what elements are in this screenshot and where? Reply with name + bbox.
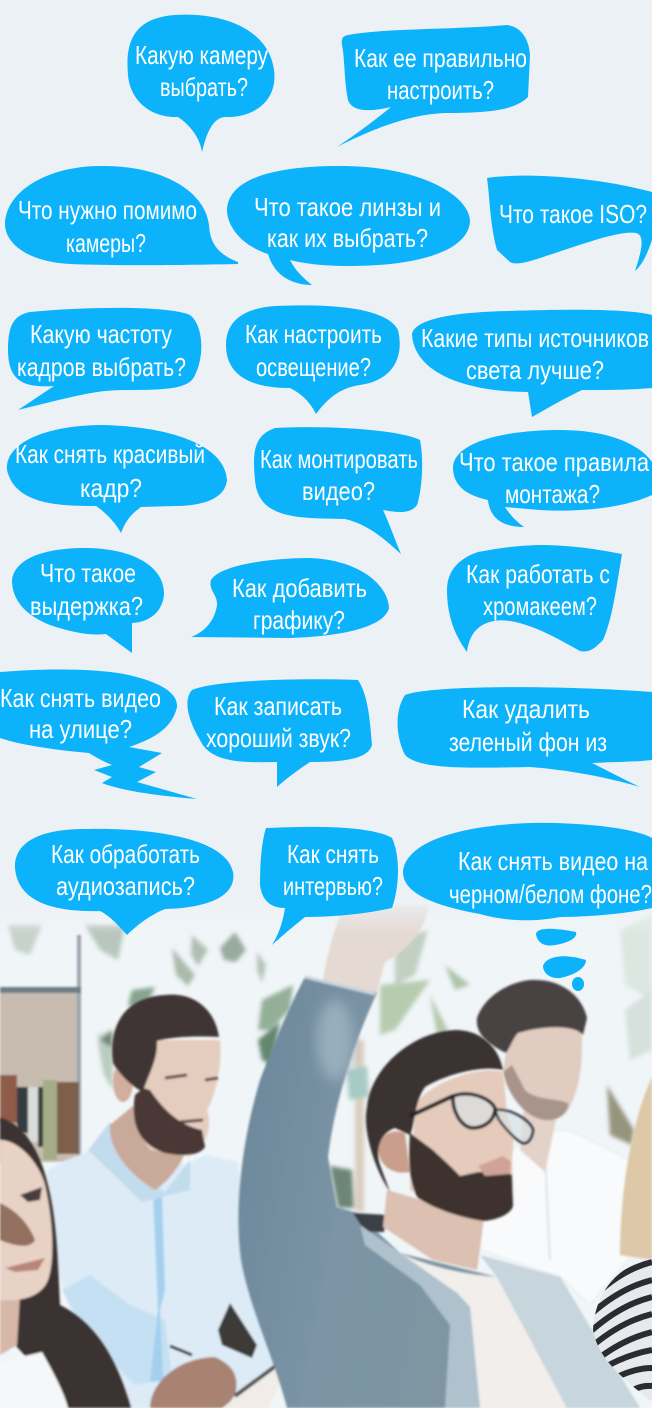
ear bbox=[378, 1131, 410, 1173]
bubble: как удалить зеленый фон: Как удалить bbox=[462, 694, 590, 724]
face bbox=[503, 1025, 582, 1120]
bubble: как снять красивый кадр: Как снять красивый bbox=[15, 439, 205, 469]
bubble: как снять красивый кадр bbox=[7, 425, 227, 533]
bubble: как снять интервью: Как снять bbox=[287, 839, 379, 869]
bubble: как ее правильно настроить: Как ее правильно bbox=[354, 43, 527, 73]
bubble: как ее правильно настроить: настроить? bbox=[387, 75, 494, 105]
neck bbox=[520, 1105, 556, 1172]
beard bbox=[409, 1133, 513, 1221]
face bbox=[410, 1070, 514, 1218]
collar bbox=[353, 1213, 387, 1232]
neck bbox=[110, 1100, 184, 1190]
bubble: что такое линзы bbox=[227, 166, 470, 285]
bubble: какую частоту кадров: кадров выбрать? bbox=[17, 352, 186, 382]
bubble: как настроить освещение: Как настроить bbox=[245, 319, 382, 349]
t-shirt bbox=[400, 1253, 567, 1408]
shirt bbox=[47, 1135, 278, 1408]
main man with raised arm bbox=[238, 905, 640, 1408]
bubble: что такое правила монтажа: монтажа? bbox=[505, 479, 600, 509]
lapel bbox=[360, 1225, 480, 1408]
bubble: какую камеру: Какую камеру bbox=[135, 40, 268, 70]
bubble: что такое выдержка: Что такое bbox=[40, 558, 136, 588]
bubble: как записать хороший звук bbox=[187, 679, 372, 787]
bubble: как обработать аудиозапись: Как обработать bbox=[51, 839, 200, 869]
face bbox=[0, 1140, 52, 1300]
bubble: что такое линзы: как их выбрать? bbox=[267, 223, 428, 253]
right jacket panel bbox=[480, 1255, 640, 1408]
beard bbox=[134, 1088, 205, 1155]
bubble: какие типы источников света: света лучше? bbox=[466, 355, 604, 385]
glasses bbox=[410, 1094, 533, 1143]
bubble: как обработать аудиозапись bbox=[15, 829, 233, 935]
lips bbox=[5, 1258, 45, 1272]
bubble: как работать с хромакеем bbox=[447, 545, 622, 652]
bubble: что такое правила монтажа bbox=[453, 430, 652, 527]
photo: students raising hands bbox=[0, 895, 652, 1408]
bubble: как работать с хромакеем: Как работать с bbox=[466, 559, 610, 589]
neck bbox=[383, 1190, 484, 1270]
bubble: как добавить графику: Как добавить bbox=[232, 573, 367, 603]
stubble bbox=[503, 1065, 568, 1120]
notebook bbox=[222, 1366, 282, 1408]
bubble: как настроить освещение: освещение? bbox=[256, 352, 371, 382]
photo backdrop bbox=[0, 900, 652, 1408]
writing hand bbox=[150, 1357, 236, 1408]
placket bbox=[150, 1195, 172, 1382]
nose shadow bbox=[0, 1203, 35, 1246]
shirt shadow bbox=[62, 1275, 172, 1385]
bubble: что нужно помимо камеры: Что нужно помимо bbox=[18, 195, 197, 225]
bubble: как работать с хромакеем: хромакеем? bbox=[483, 591, 597, 621]
bubble: как добавить графику: графику? bbox=[253, 605, 345, 635]
white top bbox=[0, 1352, 68, 1408]
striped sweater bbox=[590, 1255, 652, 1405]
sleeve highlight bbox=[317, 1000, 353, 1080]
bubble: как монтировать видео: Как монтировать bbox=[260, 444, 418, 474]
bubble: как записать хороший звук: хороший звук? bbox=[206, 723, 351, 753]
bubble: как монтировать видео: видео? bbox=[302, 476, 375, 506]
window frame and shelf bbox=[0, 935, 81, 1170]
bubble: какую частоту кадров: Какую частоту bbox=[30, 319, 172, 349]
woman with striped top bbox=[590, 1077, 652, 1405]
bubble: как обработать аудиозапись: аудиозапись? bbox=[56, 871, 195, 901]
cuff bbox=[305, 977, 375, 994]
bubble: как снять красивый кадр: кадр? bbox=[80, 473, 142, 503]
man on the left bbox=[47, 995, 282, 1408]
bubble: что такое выдержка bbox=[12, 548, 164, 653]
bubble: что такое линзы: Что такое линзы и bbox=[254, 192, 441, 222]
eye bbox=[20, 1187, 42, 1202]
bubble: как настроить освещение bbox=[226, 305, 400, 414]
hair bbox=[0, 1118, 131, 1408]
jacket sleeve and body bbox=[238, 977, 640, 1408]
bubble: какую камеру: выбрать? bbox=[160, 72, 248, 102]
thought bubble: как снять видео на черном/белом фоне bbox=[403, 823, 652, 991]
hair bbox=[112, 995, 219, 1092]
face bbox=[136, 1040, 220, 1156]
raised hand bbox=[322, 905, 428, 996]
blonde hair bbox=[620, 1077, 652, 1260]
bubble: как снять интервью bbox=[260, 827, 398, 945]
bubble: какую частоту кадров bbox=[8, 308, 201, 410]
bubble: как добавить графику bbox=[191, 558, 389, 638]
bubble: как монтировать видео bbox=[254, 427, 422, 554]
mouth bbox=[478, 1156, 511, 1176]
bubble: что такое выдержка: выдержка? bbox=[30, 591, 143, 621]
bubble: как снять видео на улице bbox=[0, 670, 197, 799]
man on the right bbox=[477, 980, 632, 1305]
top fade into background bbox=[0, 895, 652, 935]
bubble: что нужно помимо камеры bbox=[5, 166, 238, 265]
bubble: что такое ISO bbox=[487, 176, 652, 271]
bubble: как записать хороший звук: Как записать bbox=[214, 691, 342, 721]
eyes and mouth bbox=[165, 1075, 218, 1122]
bubble: как снять видео на улице: Как снять видео bbox=[0, 683, 161, 713]
bubble: как удалить зеленый фон: зеленый фон из bbox=[449, 727, 607, 757]
bubble: какую камеру bbox=[128, 15, 274, 152]
bubble: как снять видео на улице: на улице? bbox=[29, 714, 132, 744]
bubble: как снять интервью: интервью? bbox=[283, 871, 383, 901]
plants bbox=[8, 915, 652, 1212]
woman at left bbox=[0, 1118, 131, 1408]
gap under arm bbox=[218, 1303, 257, 1358]
bubble: что нужно помимо камеры: камеры? bbox=[66, 228, 146, 258]
collar bbox=[88, 1122, 190, 1202]
ear bbox=[113, 1062, 133, 1102]
neck bbox=[0, 1295, 20, 1355]
bubble: как удалить зеленый фон bbox=[398, 687, 652, 787]
bubble: какие типы источников света bbox=[412, 310, 652, 417]
white shirt bbox=[480, 1130, 632, 1305]
hair bbox=[366, 1030, 503, 1192]
hair bbox=[477, 980, 587, 1053]
bubble: как ее правильно настроить bbox=[337, 25, 530, 147]
